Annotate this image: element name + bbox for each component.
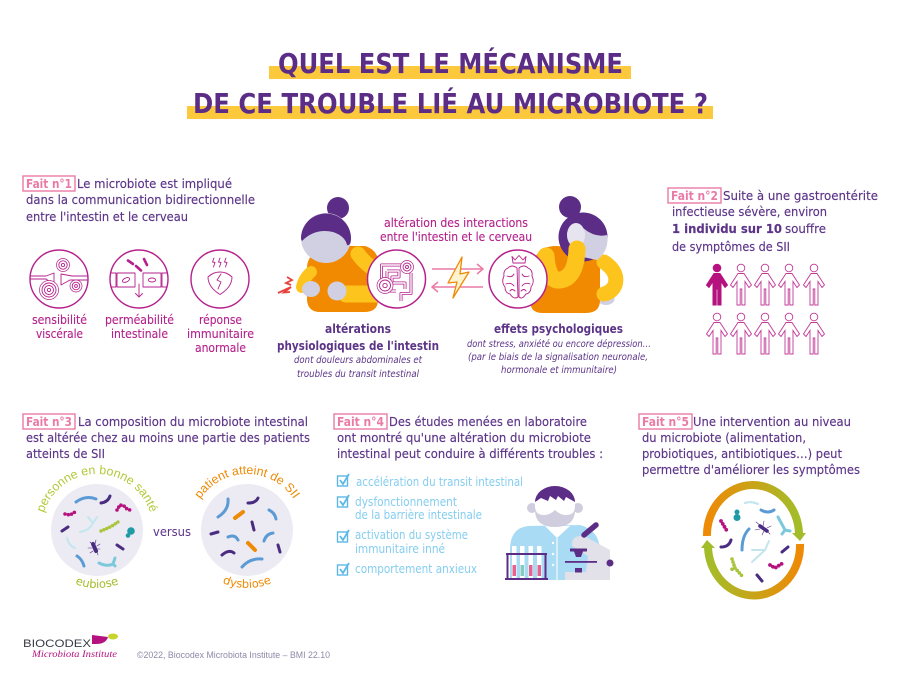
checklist: dysfonctionnement bbox=[355, 495, 457, 509]
arrow: brain to intestine bbox=[432, 282, 483, 292]
fait 4 heading: ont montré qu'une altération du microbiote bbox=[337, 430, 591, 445]
fait 3 heading: Fait n°3 bbox=[26, 414, 72, 429]
arrow: intestine to brain bbox=[432, 264, 483, 274]
label: réponse immunitaire anormale: anormale bbox=[195, 341, 246, 355]
panel: fait 5 bbox=[639, 414, 860, 596]
checklist: immunitaire inné bbox=[355, 542, 445, 556]
icon: 1 in 10 people bbox=[706, 264, 824, 354]
label: réponse immunitaire anormale: immunitaire bbox=[187, 327, 254, 341]
chart: eubiose circle bbox=[51, 484, 143, 576]
label: dysbiose: dysbiose bbox=[224, 576, 271, 588]
fait 4 heading: Fait n°4 bbox=[337, 414, 384, 429]
icon: circular arrows bbox=[701, 485, 806, 596]
fait 1 heading: dans la communication bidirectionnelle bbox=[26, 192, 255, 207]
label: versus: versus bbox=[153, 524, 191, 539]
fait 5 heading bbox=[639, 414, 860, 477]
illustration: stressed woman bbox=[530, 196, 616, 313]
text: effets psychologiques: hormonale et immunitaire) bbox=[501, 365, 617, 376]
icon: perméabilité intestinale bbox=[110, 250, 168, 308]
text: altérations physiologiques bbox=[277, 322, 439, 380]
checklist: de la barrière intestinale bbox=[355, 508, 482, 522]
fait 1 heading: entre l'intestin et le cerveau bbox=[26, 209, 188, 224]
fait 3 heading: La composition du microbiote intestinal bbox=[78, 414, 308, 429]
icon: lightning bbox=[448, 257, 469, 298]
label: perméabilité intestinale: intestinale bbox=[111, 327, 168, 341]
label: sensibilité viscérale: viscérale bbox=[36, 327, 83, 341]
fait 2 heading: Suite à une gastroentérite bbox=[723, 188, 878, 203]
icon: brain circle bbox=[489, 250, 547, 308]
fait 4 heading: intestinal peut conduire à différents troubles : bbox=[337, 446, 603, 461]
fait 5 heading: Fait n°5 bbox=[642, 414, 689, 429]
fait 4 heading: Des études menées en laboratoire bbox=[389, 414, 587, 429]
logo: Biocodex Microbiota Institute: BIOCODEX bbox=[23, 638, 92, 650]
fait 2 heading: souffre bbox=[785, 221, 826, 236]
illustration: microbiota inside ring bbox=[721, 502, 790, 581]
panel: fait 3 bbox=[22, 413, 310, 588]
label: patient atteint de SII: patient atteint de SII bbox=[195, 466, 300, 500]
text: effets psychologiques: effets psychologiques bbox=[494, 322, 623, 337]
fait 3 heading: atteints de SII bbox=[26, 446, 105, 461]
checklist: activation du système bbox=[355, 528, 468, 542]
fait 3 heading: est altérée chez au moins une partie des patients bbox=[26, 430, 310, 445]
fait 5 heading: permettre d'améliorer les symptômes bbox=[642, 462, 860, 477]
title: DE CE TROUBLE LIÉ AU MICROBIOTE ? bbox=[193, 86, 708, 120]
fait 2 heading: de symptômes de SII bbox=[672, 239, 790, 254]
label: réponse immunitaire anormale bbox=[187, 313, 254, 355]
panel: fait 2 bbox=[668, 188, 878, 354]
icon: réponse immunitaire bbox=[191, 250, 249, 308]
icon: pain lightning bbox=[278, 277, 292, 293]
heading: altération des interactions bbox=[380, 216, 532, 244]
logo: Biocodex Microbiota Institute: Microbiota Institute bbox=[31, 650, 117, 660]
text: altérations physiologiques: physiologiques de l'intestin bbox=[277, 339, 439, 354]
title: QUEL EST LE MÉCANISME bbox=[278, 46, 623, 80]
illustration: woman with abdominal pain bbox=[301, 197, 384, 312]
icon: intestine circle bbox=[368, 250, 426, 308]
label: perméabilité intestinale: perméabilité bbox=[105, 313, 174, 327]
fait 3 heading bbox=[23, 414, 310, 461]
text: altérations physiologiques: altérations bbox=[325, 322, 391, 337]
fait 1 heading bbox=[23, 176, 255, 224]
fait 2 heading: 1 individu sur 10 bbox=[672, 221, 782, 236]
fait 2 heading: Fait n°2 bbox=[671, 188, 718, 203]
fait 4 heading bbox=[334, 414, 603, 461]
text: effets psychologiques: (par le biais de la signalisation neuronale, bbox=[468, 352, 648, 363]
heading: altération des interactions: entre l'intestin et le cerveau bbox=[380, 230, 532, 244]
label: sensibilité viscérale: sensibilité bbox=[32, 313, 87, 327]
illustration: scientist with microscope bbox=[505, 486, 614, 580]
text: altérations physiologiques: dont douleurs abdominales et bbox=[294, 355, 423, 366]
text: effets psychologiques bbox=[467, 322, 651, 376]
fait 1 heading: Le microbiote est impliqué bbox=[77, 176, 232, 191]
title bbox=[187, 46, 713, 120]
fait 2 heading: infectieuse sévère, environ bbox=[672, 204, 827, 219]
fait 5 heading: du microbiote (alimentation, bbox=[642, 430, 806, 445]
checklist: comportement anxieux bbox=[355, 562, 477, 576]
text: altérations physiologiques: troubles du transit intestinal bbox=[297, 369, 419, 380]
chart: dysbiose circle bbox=[201, 484, 293, 576]
panel: fait 4 bbox=[334, 414, 614, 580]
label: réponse immunitaire anormale: réponse bbox=[199, 313, 242, 327]
icon: sensibilité viscérale bbox=[30, 250, 88, 308]
label: eubiose: eubiose bbox=[76, 578, 118, 588]
panel: fait 1 bbox=[23, 176, 255, 355]
fait 2 heading bbox=[668, 188, 878, 254]
label: sensibilité viscérale bbox=[32, 313, 87, 341]
label: personne en bonne santé: personne en bonne santé bbox=[38, 465, 158, 513]
fait 5 heading: probiotiques, antibiotiques…) peut bbox=[642, 446, 842, 461]
heading: altération des interactions: altération des interactions bbox=[384, 216, 528, 230]
text: effets psychologiques: dont stress, anxiété ou encore dépression… bbox=[467, 338, 651, 350]
checklist: accélération du transit intestinal bbox=[356, 475, 523, 489]
fait 5 heading: Une intervention au niveau bbox=[693, 414, 851, 429]
label: perméabilité intestinale bbox=[105, 313, 174, 341]
checklist bbox=[338, 474, 523, 576]
logo: Biocodex Microbiota Institute bbox=[23, 634, 118, 660]
copyright: ©2022, Biocodex Microbiota Institute – BMI 22.10 bbox=[137, 650, 330, 660]
fait 1 heading: Fait n°1 bbox=[26, 176, 72, 191]
